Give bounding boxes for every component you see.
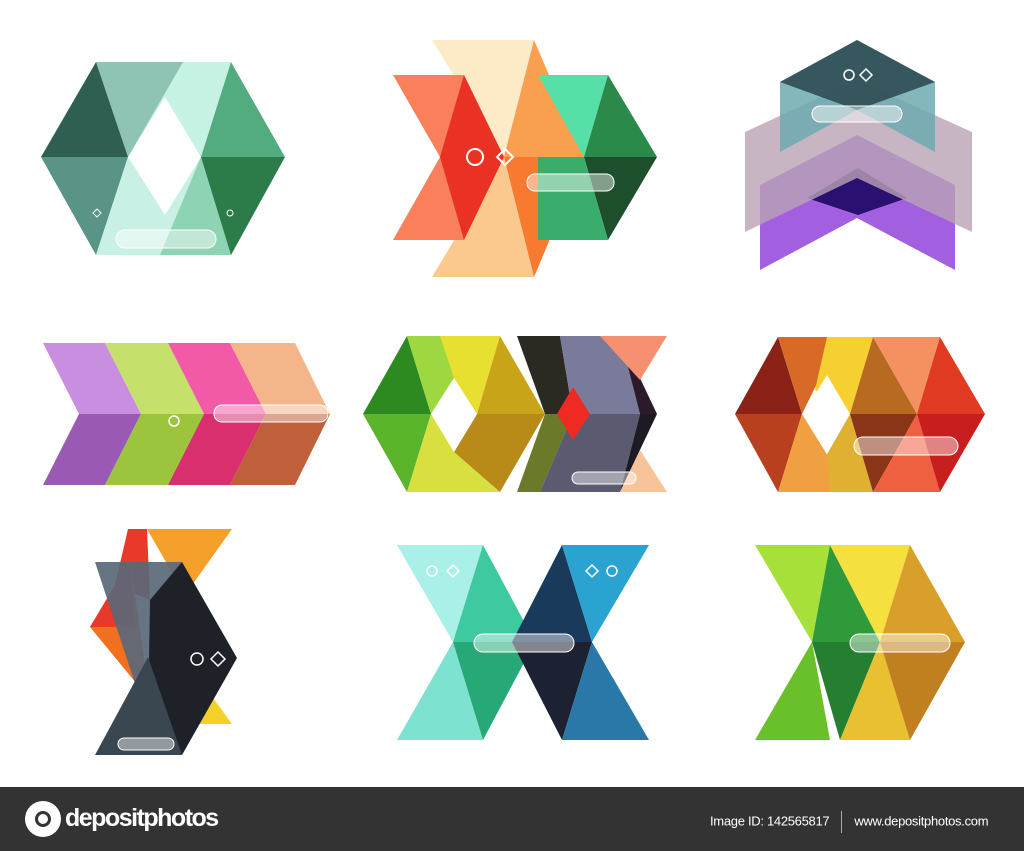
panel: X shape [397, 545, 649, 740]
panel: colored chevron strip [43, 343, 330, 485]
panel: warm hexagon [735, 337, 985, 492]
icon: camera logo [25, 801, 61, 837]
panel: green yellow arrow [755, 545, 965, 740]
logo [25, 801, 218, 837]
panel: green hexagon [41, 62, 285, 255]
panel: orange red green arrows [393, 40, 657, 277]
panel: dark stacked triangles [90, 529, 237, 755]
logo: depositphotos [65, 804, 218, 832]
panel: upward chevrons [745, 40, 972, 270]
image id text: Image ID: 142565817 www.depositphotos.com [710, 813, 988, 828]
footer bar [0, 787, 1024, 851]
panel: green yellow and dark hexagons [363, 336, 667, 492]
